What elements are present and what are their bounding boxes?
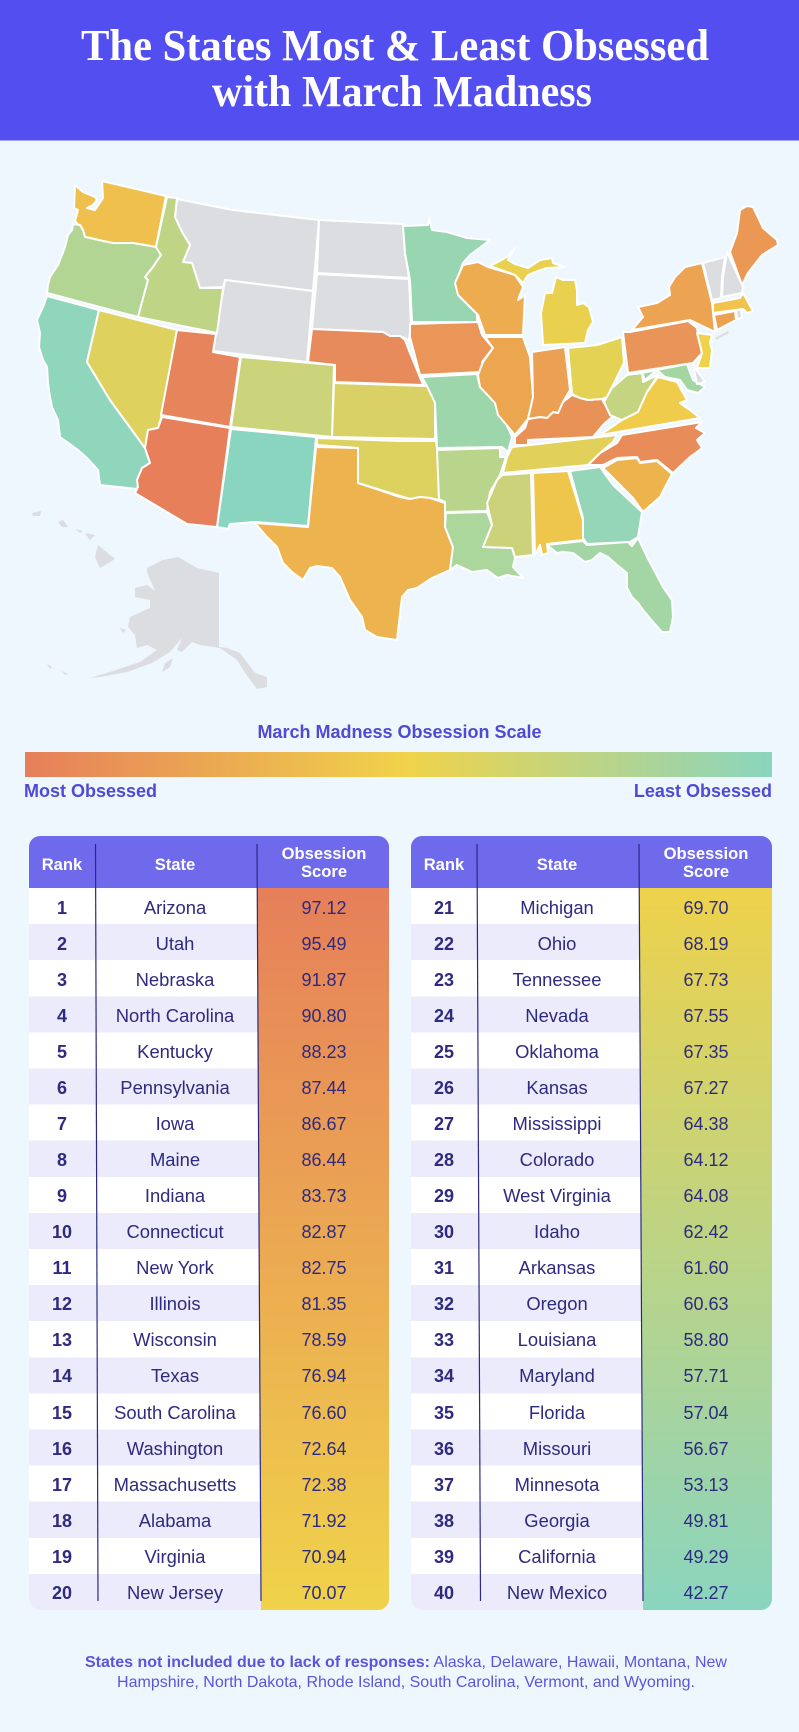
row 20: New Jersey xyxy=(127,1582,223,1603)
table: ranks 21 to 40: Score xyxy=(683,862,729,881)
row 33: Louisiana xyxy=(518,1329,596,1350)
row 3 xyxy=(57,969,347,990)
row 20: 20 xyxy=(52,1583,72,1603)
row 39: 39 xyxy=(434,1547,454,1567)
row 25: 67.35 xyxy=(683,1042,729,1062)
row 21 xyxy=(434,897,729,918)
row 1: Arizona xyxy=(144,897,206,918)
row 4: 4 xyxy=(57,1006,67,1026)
row 29: 29 xyxy=(434,1186,454,1206)
row 34: 57.71 xyxy=(683,1366,729,1386)
row 22: Ohio xyxy=(538,933,576,954)
row 27: 64.38 xyxy=(683,1114,729,1134)
row 24 xyxy=(434,1005,729,1026)
row 28 xyxy=(434,1149,729,1170)
row 21: 69.70 xyxy=(683,898,729,918)
row 27: 27 xyxy=(434,1114,454,1134)
row 25: Oklahoma xyxy=(515,1041,599,1062)
state: New Mexico xyxy=(217,429,316,529)
row 31 xyxy=(434,1257,729,1278)
row 26 xyxy=(434,1077,729,1098)
row 40: 42.27 xyxy=(683,1583,729,1603)
state: Kansas xyxy=(332,383,435,439)
row 37: Minnesota xyxy=(515,1474,599,1495)
state: West Virginia xyxy=(604,373,658,420)
title xyxy=(81,21,709,116)
row 11: 11 xyxy=(52,1258,72,1278)
row 30 xyxy=(434,1221,729,1242)
state: Maryland xyxy=(642,364,705,393)
row 19 xyxy=(52,1546,347,1567)
table: ranks 1 to 20: Rank xyxy=(42,855,82,874)
row 17 xyxy=(52,1474,347,1495)
row 11 xyxy=(52,1257,347,1278)
row 15 xyxy=(52,1402,347,1423)
row 40: New Mexico xyxy=(507,1582,607,1603)
row 6: 87.44 xyxy=(301,1078,347,1098)
row 28: Colorado xyxy=(520,1149,594,1170)
row 3: Nebraska xyxy=(136,969,214,990)
row 27: Mississippi xyxy=(513,1113,601,1134)
state: Colorado xyxy=(231,357,334,437)
state: Montana xyxy=(175,199,319,291)
state: Delaware xyxy=(693,365,705,384)
state: Florida xyxy=(547,538,673,632)
row 7 xyxy=(57,1113,347,1134)
row 1 xyxy=(57,897,347,918)
state: Oregon xyxy=(47,224,161,317)
row 15: South Carolina xyxy=(114,1402,236,1423)
row 28: 28 xyxy=(434,1150,454,1170)
state: Long Island xyxy=(715,331,729,340)
state: Illinois xyxy=(478,337,533,435)
row 5 xyxy=(57,1041,347,1062)
row 26: 67.27 xyxy=(683,1078,729,1098)
row 34: 34 xyxy=(434,1366,454,1386)
state: Alaska xyxy=(47,557,267,689)
row 40: 40 xyxy=(434,1583,454,1603)
row 36 xyxy=(434,1438,729,1459)
row 10: Connecticut xyxy=(126,1221,224,1242)
row 12 xyxy=(52,1293,347,1314)
row 26: 26 xyxy=(434,1078,454,1098)
row 16: 72.64 xyxy=(301,1439,347,1459)
row 23: 23 xyxy=(434,970,454,990)
row 31: 31 xyxy=(434,1258,454,1278)
row 16 xyxy=(52,1438,347,1459)
row 18: Alabama xyxy=(139,1510,211,1531)
row 15: 76.60 xyxy=(301,1403,347,1423)
row 37 xyxy=(434,1474,729,1495)
row 38: 38 xyxy=(434,1511,454,1531)
row 17: 17 xyxy=(52,1475,72,1495)
row 22: 68.19 xyxy=(683,934,729,954)
row 19: 19 xyxy=(52,1547,72,1567)
row 6: Pennsylvania xyxy=(120,1077,230,1098)
table: ranks 1 to 20: Obsession xyxy=(282,844,366,863)
table: ranks 1 to 20: Score xyxy=(301,862,347,881)
row 30: 30 xyxy=(434,1222,454,1242)
table: ranks 21 to 40: State xyxy=(537,855,577,874)
state: New Jersey xyxy=(697,333,712,368)
table: ranks 1 to 20: State xyxy=(155,855,195,874)
row 9 xyxy=(57,1185,347,1206)
row 5: 5 xyxy=(57,1042,67,1062)
row 13: 13 xyxy=(52,1330,72,1350)
row 18: 71.92 xyxy=(301,1511,347,1531)
row 30: 62.42 xyxy=(683,1222,729,1242)
table: ranks 1 to 20 xyxy=(29,836,389,1610)
row 20: 70.07 xyxy=(301,1583,347,1603)
row 9: Indiana xyxy=(145,1185,205,1206)
state: Vermont xyxy=(703,257,725,300)
row 37: 53.13 xyxy=(683,1475,729,1495)
row 34 xyxy=(434,1365,729,1386)
row 22 xyxy=(434,933,729,954)
state: Rhode Island xyxy=(736,309,742,319)
row 3: 91.87 xyxy=(301,970,347,990)
row 10 xyxy=(52,1221,347,1242)
row 12: 81.35 xyxy=(301,1294,347,1314)
row 23: Tennessee xyxy=(513,969,601,990)
row 7: 86.67 xyxy=(301,1114,347,1134)
state: Massachusetts xyxy=(713,293,753,313)
row 34: Maryland xyxy=(519,1365,595,1386)
row 36: 56.67 xyxy=(683,1439,729,1459)
state: Alabama xyxy=(533,471,583,555)
row 2 xyxy=(57,933,347,954)
state: Michigan xyxy=(490,248,593,345)
row 9: 83.73 xyxy=(301,1186,347,1206)
state: South Dakota xyxy=(312,274,411,340)
row 14: 14 xyxy=(52,1366,72,1386)
scale gradient bar xyxy=(25,752,772,777)
state: Iowa xyxy=(410,322,493,375)
title: with March Madness xyxy=(212,67,592,116)
state: Oklahoma xyxy=(317,438,439,500)
row 4 xyxy=(57,1005,347,1026)
row 26: Kansas xyxy=(526,1077,588,1098)
row 13 xyxy=(52,1329,347,1350)
state: North Carolina xyxy=(588,422,705,473)
row 32: 60.63 xyxy=(683,1294,729,1314)
row 29: 64.08 xyxy=(683,1186,729,1206)
state: South Carolina xyxy=(603,458,672,512)
table: ranks 21 to 40: Obsession xyxy=(664,844,748,863)
row 11: 82.75 xyxy=(301,1258,347,1278)
map of the United States xyxy=(32,180,779,689)
row 38: Georgia xyxy=(524,1510,590,1531)
row 17: 72.38 xyxy=(301,1475,347,1495)
header banner xyxy=(0,0,799,140)
state: California xyxy=(37,296,150,489)
row 33 xyxy=(434,1329,729,1350)
row 7: 7 xyxy=(57,1114,67,1134)
row 39 xyxy=(411,1537,775,1573)
state: Nevada xyxy=(87,310,177,448)
row 2: Utah xyxy=(156,933,194,954)
table: ranks 21 to 40 xyxy=(411,836,772,1610)
row 8 xyxy=(57,1149,347,1170)
row 5: Kentucky xyxy=(137,1041,213,1062)
state: New York xyxy=(632,263,715,332)
row 14: Texas xyxy=(151,1365,199,1386)
row 1: 1 xyxy=(57,898,67,918)
state: Connecticut xyxy=(714,311,736,330)
row 6: 6 xyxy=(57,1078,67,1098)
state: Pennsylvania xyxy=(623,321,702,373)
row 16: Washington xyxy=(127,1438,223,1459)
row 35 xyxy=(434,1402,729,1423)
row 24: 24 xyxy=(434,1006,454,1026)
row 2: 95.49 xyxy=(301,934,347,954)
row 30: Idaho xyxy=(534,1221,580,1242)
row 24: Nevada xyxy=(525,1005,589,1026)
row 32: Oregon xyxy=(526,1293,588,1314)
row 19: Virginia xyxy=(144,1546,206,1567)
row 32 xyxy=(434,1293,729,1314)
row 31: Arkansas xyxy=(519,1257,595,1278)
row 12: Illinois xyxy=(149,1293,201,1314)
row 38 xyxy=(434,1510,729,1531)
state: Minnesota xyxy=(403,218,490,322)
row 6 xyxy=(57,1077,347,1098)
row 35: Florida xyxy=(529,1402,585,1423)
row 31: 61.60 xyxy=(683,1258,729,1278)
row 33: 33 xyxy=(434,1330,454,1350)
state: Idaho xyxy=(138,197,223,333)
row 40 xyxy=(411,1573,775,1609)
state: Indiana xyxy=(528,347,570,419)
state: Washington xyxy=(74,181,166,247)
state: Arizona xyxy=(135,417,230,527)
row 20 xyxy=(52,1582,347,1603)
row 3: 3 xyxy=(57,970,67,990)
row 35: 35 xyxy=(434,1403,454,1423)
row 32: 32 xyxy=(434,1294,454,1314)
row 14 xyxy=(52,1365,347,1386)
scale title: March Madness Obsession Scale xyxy=(257,722,542,742)
row 33: 58.80 xyxy=(683,1330,729,1350)
footnote: States not included due to lack of responses: Alaska, Delaware, Hawaii, Montana, New xyxy=(85,1654,727,1671)
row 25: 25 xyxy=(434,1042,454,1062)
state: Mississippi xyxy=(483,473,533,557)
state: Maine xyxy=(730,206,778,285)
state: Tennessee xyxy=(503,435,617,473)
row 8: 8 xyxy=(57,1150,67,1170)
state: Ohio xyxy=(568,337,624,400)
row 35: 57.04 xyxy=(683,1403,729,1423)
row 22: 22 xyxy=(434,934,454,954)
row 4: 90.80 xyxy=(301,1006,347,1026)
scale label: least obsessed: Least Obsessed xyxy=(634,781,772,801)
state: Wyoming xyxy=(213,280,313,362)
row 21: Michigan xyxy=(520,897,594,918)
row 24: 67.55 xyxy=(683,1006,729,1026)
scale label: most obsessed: Most Obsessed xyxy=(24,781,157,801)
row 11: New York xyxy=(136,1257,214,1278)
row 36: 36 xyxy=(434,1439,454,1459)
footnote xyxy=(6,1653,799,1693)
row 23 xyxy=(434,969,729,990)
row 29 xyxy=(434,1185,729,1206)
row 36: Missouri xyxy=(523,1438,591,1459)
row 39: 49.29 xyxy=(683,1547,729,1567)
state: Wisconsin xyxy=(455,262,525,335)
state: Utah xyxy=(161,330,240,427)
state: Texas xyxy=(255,447,453,640)
table: ranks 21 to 40: Rank xyxy=(424,855,464,874)
row 1: 97.12 xyxy=(301,898,347,918)
state: Virginia xyxy=(600,377,700,435)
row 27 xyxy=(434,1113,729,1134)
row 10: 82.87 xyxy=(301,1222,347,1242)
state: Hawaii xyxy=(32,511,115,568)
row 18 xyxy=(52,1510,347,1531)
state: North Dakota xyxy=(317,220,409,278)
row 7: Iowa xyxy=(156,1113,194,1134)
row 14: 76.94 xyxy=(301,1366,347,1386)
footnote: Hampshire, North Dakota, Rhode Island, South Carolina, Vermont, and Wyoming. xyxy=(117,1674,695,1691)
title: The States Most & Least Obsessed xyxy=(81,21,709,70)
row 39: California xyxy=(518,1546,596,1567)
state: Louisiana xyxy=(445,512,523,578)
state: Kentucky xyxy=(515,395,612,445)
state: New Hampshire xyxy=(722,252,743,297)
state: Nebraska xyxy=(308,329,423,385)
state: Georgia xyxy=(570,467,642,544)
row 38: 49.81 xyxy=(683,1511,729,1531)
row 18: 18 xyxy=(52,1511,72,1531)
state: Arkansas xyxy=(437,448,506,512)
row 9: 9 xyxy=(57,1186,67,1206)
row 8: Maine xyxy=(150,1149,200,1170)
row 21: 21 xyxy=(434,898,454,918)
row 17: Massachusetts xyxy=(114,1474,236,1495)
row 25 xyxy=(434,1041,729,1062)
row 8: 86.44 xyxy=(301,1150,347,1170)
state: Missouri xyxy=(422,374,512,452)
row 28: 64.12 xyxy=(683,1150,729,1170)
row 29: West Virginia xyxy=(503,1185,611,1206)
row 37: 37 xyxy=(434,1475,454,1495)
row 13: Wisconsin xyxy=(133,1329,217,1350)
row 23: 67.73 xyxy=(683,970,729,990)
row 4: North Carolina xyxy=(116,1005,234,1026)
row 2: 2 xyxy=(57,934,67,954)
row 13: 78.59 xyxy=(301,1330,347,1350)
row 5: 88.23 xyxy=(301,1042,347,1062)
row 19: 70.94 xyxy=(301,1547,347,1567)
row 16: 16 xyxy=(52,1439,72,1459)
row 10: 10 xyxy=(52,1222,72,1242)
row 12: 12 xyxy=(52,1294,72,1314)
row 15: 15 xyxy=(52,1403,72,1423)
